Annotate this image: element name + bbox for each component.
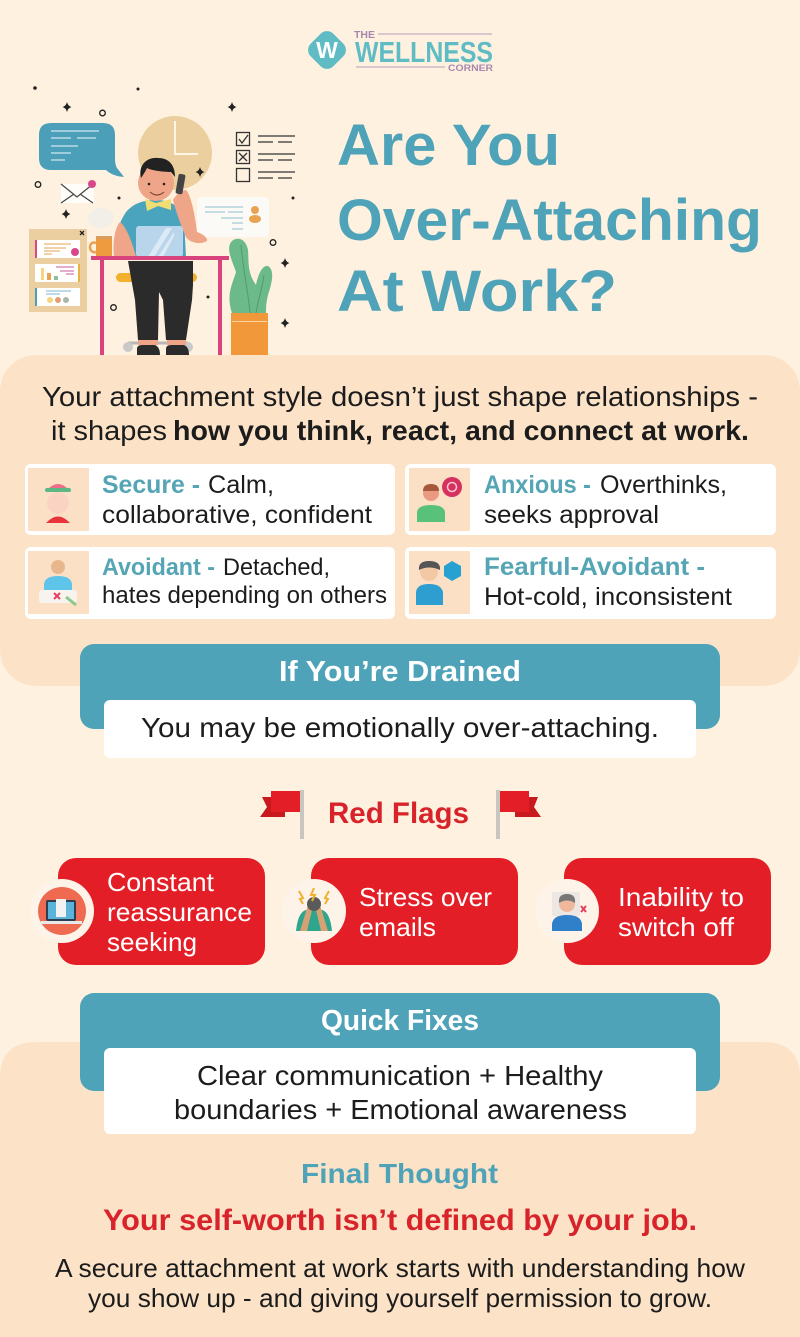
card: Avoidant: Detached, <box>223 554 330 581</box>
logo: The Wellness Corner: CORNER <box>448 63 494 73</box>
title: Over-Attaching <box>337 188 762 253</box>
panel: Quick Fixes: boundaries + Emotional awareness <box>174 1094 627 1125</box>
panel: Quick Fixes: Clear communication + Healthy <box>197 1060 603 1091</box>
icon: meditating head with lotus <box>46 484 70 523</box>
text: Final Thought: you show up - and giving yourself permission to grow. <box>88 1283 712 1313</box>
card: Secure: Secure - <box>102 471 200 499</box>
intro text: Your attachment style doesn’t just shape relationships - <box>42 381 758 412</box>
card: Inability to switch off <box>535 858 771 965</box>
title: At Work? <box>337 259 617 324</box>
icon: tired man <box>535 879 599 943</box>
icon: right flag <box>496 790 541 839</box>
card: Avoidant: hates depending on others <box>102 582 387 609</box>
title <box>337 113 762 324</box>
illustration: chair <box>116 273 197 352</box>
panel: Quick Fixes: Quick Fixes <box>321 1005 479 1037</box>
text: Final Thought: A secure attachment at work starts with understanding how <box>55 1253 745 1283</box>
card: Secure <box>25 464 395 535</box>
panel: If You're Drained <box>80 644 720 758</box>
icon: steaming mug <box>88 208 114 256</box>
illustration: message card with avatar <box>197 197 269 237</box>
card: Fearful-Avoidant <box>405 547 776 619</box>
icon: fearful man <box>416 561 461 605</box>
card: Stress over emails <box>282 858 518 965</box>
panel: If You're Drained: If You’re Drained <box>279 656 521 688</box>
card: Anxious: Overthinks, <box>600 471 727 499</box>
card: Avoidant: Avoidant - <box>102 554 215 581</box>
card: Stress over emails: Stress over <box>359 882 492 912</box>
intro text: it shapes <box>51 415 167 446</box>
card: Anxious <box>405 464 776 535</box>
icon: left flag <box>260 790 304 839</box>
icon: wall clock <box>138 116 212 190</box>
illustration: wall board with charts <box>29 229 87 312</box>
card: Fearful-Avoidant: Hot-cold, inconsistent <box>484 583 732 611</box>
card: Constant reassurance seeking <box>30 858 265 965</box>
card: Secure: collaborative, confident <box>102 501 372 529</box>
illustration: man <box>113 158 207 355</box>
icon: envelope with notification <box>61 180 96 203</box>
intro text <box>42 381 758 446</box>
panel: bottom background <box>0 1042 800 1337</box>
logo: The Wellness Corner: THE <box>354 30 375 41</box>
panel: If You're Drained: You may be emotionally over-attaching. <box>141 712 659 743</box>
icon: detached person at desk <box>39 560 77 605</box>
icon: checklist <box>236 132 295 182</box>
title: Are You <box>337 113 560 178</box>
icon: anxious man with thought bubble <box>417 477 462 522</box>
icon: laptop on red circle <box>30 879 94 943</box>
intro text: how you think, react, and connect at work. <box>173 415 749 446</box>
illustration: desk <box>91 256 229 355</box>
heading: Red Flags: Red Flags <box>328 797 469 830</box>
card: Avoidant <box>25 547 395 619</box>
card: Anxious: Anxious - <box>484 471 591 499</box>
card: Inability to switch off: switch off <box>618 912 735 942</box>
decorative sparkles <box>33 86 294 328</box>
card: Stress over emails: emails <box>359 912 436 942</box>
icon: speech bubble <box>39 123 124 177</box>
card: Fearful-Avoidant: Fearful-Avoidant - <box>484 553 705 581</box>
text: Final Thought: Final Thought <box>301 1158 498 1189</box>
illustration: man working at desk <box>29 86 295 355</box>
card: Constant reassurance seeking: reassurance <box>107 897 252 927</box>
icon: stressed person with lightning <box>282 879 346 943</box>
card: Constant reassurance seeking: Constant <box>107 867 215 897</box>
panel: attachment styles <box>0 355 800 686</box>
text: Final Thought <box>55 1158 745 1313</box>
logo: The Wellness Corner <box>304 27 494 73</box>
heading: Red Flags <box>260 790 541 839</box>
illustration: plant in pot <box>229 239 272 355</box>
text: Final Thought: Your self-worth isn’t defined by your job. <box>103 1204 697 1237</box>
logo: The Wellness Corner: W <box>316 37 338 63</box>
panel: Quick Fixes <box>80 993 720 1134</box>
card: Inability to switch off: Inability to <box>618 882 744 912</box>
card: Secure: Calm, <box>208 471 274 499</box>
card: Anxious: seeks approval <box>484 501 659 529</box>
card: Constant reassurance seeking: seeking <box>107 927 197 957</box>
logo: The Wellness Corner: WELLNESS <box>355 37 493 69</box>
